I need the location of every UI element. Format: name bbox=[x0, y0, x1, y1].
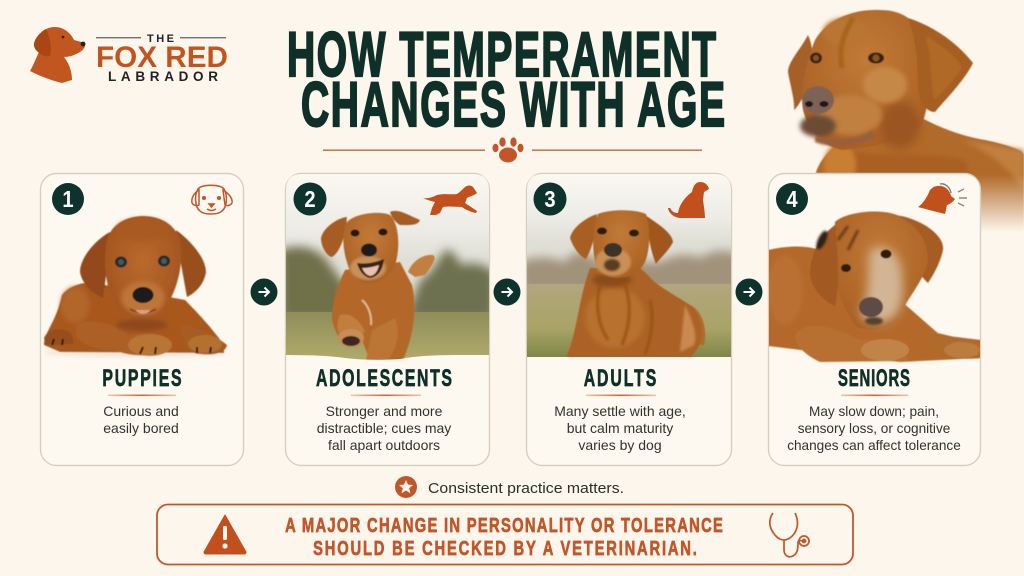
number badge 2 bbox=[294, 182, 326, 216]
description: changes can affect tolerance bbox=[787, 438, 961, 453]
title bbox=[287, 21, 725, 140]
arrow 3 bbox=[736, 278, 762, 306]
consistent practice note: Consistent practice matters. bbox=[428, 480, 624, 497]
description: Stronger and more bbox=[326, 403, 443, 419]
card frame bbox=[526, 174, 732, 466]
heading: adults: ADULTS bbox=[584, 366, 656, 392]
heading: seniors: SENIORS bbox=[838, 366, 910, 392]
logo bbox=[30, 27, 228, 84]
warning text: SHOULD BE CHECKED BY A VETERINARIAN. bbox=[313, 537, 697, 560]
number badge 2: 2 bbox=[304, 186, 316, 212]
description bbox=[787, 404, 961, 453]
panel: seniors bbox=[767, 174, 981, 466]
warning text bbox=[285, 514, 723, 560]
number badge 1: 1 bbox=[62, 186, 74, 212]
description bbox=[317, 403, 451, 453]
description bbox=[103, 403, 179, 436]
warning text: A MAJOR CHANGE IN PERSONALITY OR TOLERANCE bbox=[285, 514, 723, 537]
icon: paw bbox=[492, 137, 524, 162]
number badge 1 bbox=[52, 183, 84, 215]
logo wordmark: LABRADOR bbox=[108, 69, 218, 84]
icon: senior dog with sound lines bbox=[918, 184, 967, 214]
description: Many settle with age, bbox=[554, 403, 686, 419]
divider with paw icon bbox=[323, 137, 702, 162]
panel: puppies bbox=[40, 174, 244, 466]
card frame bbox=[286, 174, 490, 466]
description: Curious and bbox=[103, 403, 179, 419]
number badge 4: 4 bbox=[786, 186, 798, 212]
description: varies by dog bbox=[578, 437, 662, 453]
number badge 3: 3 bbox=[544, 186, 556, 212]
title: CHANGES WITH AGE bbox=[301, 71, 725, 140]
description: fall apart outdoors bbox=[328, 437, 440, 453]
title: HOW TEMPERAMENT bbox=[287, 21, 716, 90]
icon: sitting dog bbox=[668, 182, 709, 218]
heading underline bbox=[108, 394, 176, 396]
number badge 4 bbox=[776, 183, 808, 215]
description: but calm maturity bbox=[567, 420, 673, 436]
icon: running dog bbox=[423, 186, 477, 215]
icon: puppy face outline bbox=[192, 185, 232, 214]
logo wordmark: THE bbox=[147, 33, 174, 45]
panel: adults bbox=[520, 174, 740, 466]
logo dog head bbox=[30, 27, 85, 83]
heading underline bbox=[586, 394, 656, 396]
adult dog photo bbox=[520, 174, 740, 358]
icon: warning triangle bbox=[204, 515, 246, 554]
puppy photo bbox=[43, 216, 227, 357]
description: May slow down; pain, bbox=[809, 404, 939, 419]
icon: star badge bbox=[395, 476, 417, 498]
logo wordmark: FOX RED bbox=[96, 41, 228, 74]
panel: adolescents bbox=[280, 174, 495, 466]
logo wordmark bbox=[96, 33, 228, 84]
icon: stethoscope bbox=[770, 513, 809, 557]
heading: adolescents: ADOLESCENTS bbox=[316, 366, 452, 392]
card frame bbox=[768, 174, 980, 466]
description bbox=[554, 403, 686, 453]
description: easily bored bbox=[103, 420, 179, 436]
veterinarian warning banner bbox=[157, 504, 853, 564]
description: distractible; cues may bbox=[317, 420, 451, 436]
hero dog portrait bbox=[788, 10, 1024, 240]
arrow 2 bbox=[494, 278, 520, 306]
senior dog photo bbox=[767, 211, 981, 362]
heading: puppies: PUPPIES bbox=[102, 366, 182, 392]
consistent practice note bbox=[395, 476, 624, 498]
heading underline bbox=[351, 394, 421, 396]
arrow 1 bbox=[250, 278, 278, 306]
heading underline bbox=[841, 394, 908, 396]
description: sensory loss, or cognitive bbox=[798, 421, 950, 436]
card frame bbox=[40, 174, 244, 466]
number badge 3 bbox=[534, 182, 566, 216]
running dog photo bbox=[280, 174, 495, 360]
